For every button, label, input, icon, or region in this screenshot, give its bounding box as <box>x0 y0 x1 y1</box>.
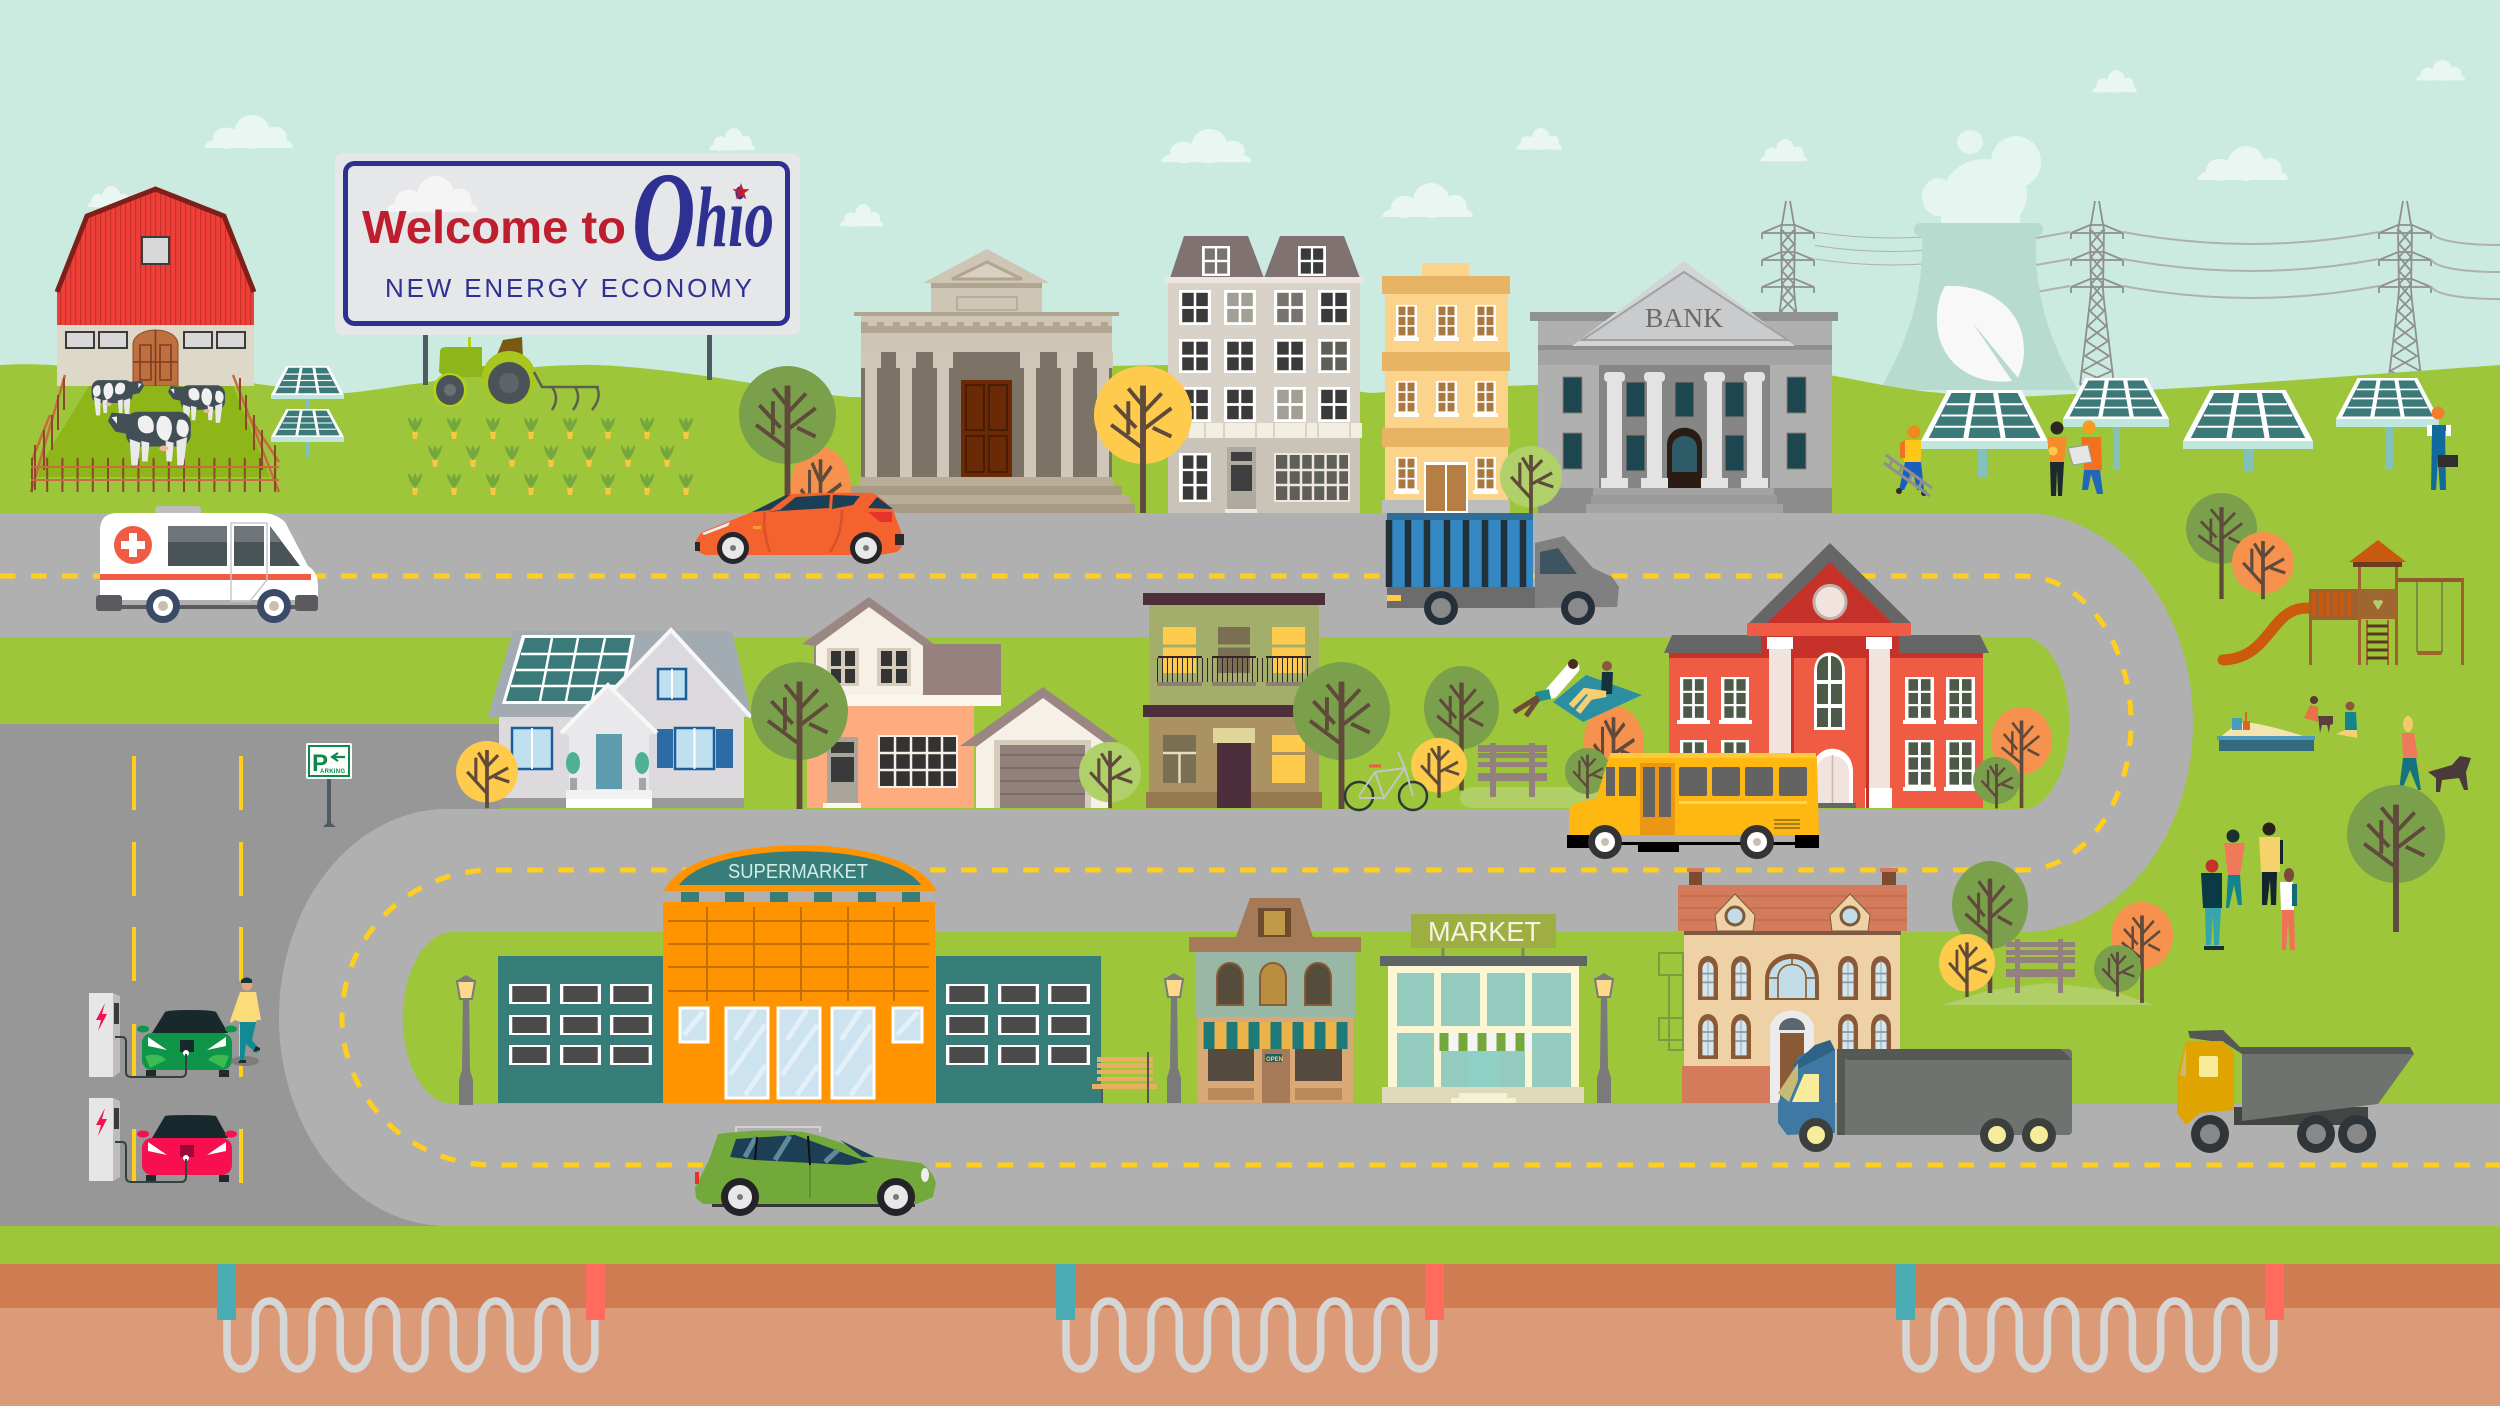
columned temple building <box>840 249 1135 513</box>
green hatchback <box>695 1127 936 1216</box>
person beside charging car <box>230 978 261 1066</box>
town hall <box>1659 868 1907 1103</box>
sign subtitle: NEW ENERGY ECONOMY <box>385 273 752 303</box>
solar array <box>1921 378 2439 477</box>
Ohio script wordmark: O <box>632 146 695 288</box>
power plant steam <box>1922 130 2041 231</box>
welcome sign <box>335 146 800 385</box>
ambulance <box>96 506 318 623</box>
right park tree <box>2347 785 2445 932</box>
tractor <box>433 337 599 410</box>
mid-row trees back <box>1424 666 1644 808</box>
open sign: OPEN <box>1266 1057 1283 1063</box>
cooling tower with leaf <box>1880 223 2078 390</box>
worker with toolbox <box>2427 406 2458 490</box>
playground <box>2223 540 2464 665</box>
Ohio script wordmark: hio <box>695 169 774 265</box>
mid-row trees front <box>456 662 1467 809</box>
market store <box>1380 914 1587 1103</box>
park bench by school <box>1478 743 1547 797</box>
bank building <box>1530 261 1838 513</box>
road and parking lot <box>0 513 2500 1226</box>
parking sign: ARKING <box>320 769 345 775</box>
parking sign <box>306 743 352 827</box>
workers <box>1884 406 2458 496</box>
Ohio star <box>732 183 750 199</box>
yellow dump truck <box>2177 1030 2414 1153</box>
peach house <box>802 597 1119 808</box>
geothermal loops <box>217 1264 2284 1369</box>
picnic blanket and people <box>1514 659 1642 722</box>
sandbox and children <box>2217 696 2357 751</box>
crop rows <box>408 417 693 495</box>
red brick school <box>1664 543 1989 808</box>
supermarket <box>498 845 1101 1103</box>
top-row trees <box>739 366 2294 599</box>
tall grey townhouse <box>1165 236 1363 513</box>
worker with ladder <box>1884 426 1932 496</box>
house with rooftop solar <box>488 630 752 808</box>
bicycle <box>1345 752 1427 810</box>
cow pen with fence <box>31 375 281 492</box>
blue delivery truck <box>1387 513 1619 625</box>
woman white top <box>2280 868 2297 950</box>
woman walking dog <box>2399 716 2471 792</box>
man dark jacket <box>2201 860 2224 950</box>
EV charging station red <box>89 1098 237 1182</box>
worker with plan <box>2068 420 2103 494</box>
green hills and ground <box>0 364 2500 1270</box>
yellow school bus <box>1567 753 1819 859</box>
orange car <box>695 493 904 564</box>
power line pylons and wires <box>1762 201 2500 385</box>
barn <box>57 189 254 386</box>
yellow townhouse <box>1382 263 1510 513</box>
green apartment building <box>1143 593 1325 808</box>
cows <box>92 380 225 465</box>
woman coral shirt <box>2224 830 2245 908</box>
wooden bench <box>2006 939 2075 993</box>
sign headline: Welcome to <box>362 201 626 253</box>
man yellow vest <box>2259 822 2283 905</box>
market sign text: MARKET <box>1428 916 1541 947</box>
EV charging station green <box>89 993 237 1077</box>
bank label: BANK <box>1645 303 1723 333</box>
clouds <box>87 60 2465 227</box>
park trees and bench <box>1939 861 2173 1005</box>
soil layers <box>0 1264 2500 1406</box>
street lamps <box>456 973 1614 1105</box>
orange bench <box>1092 1052 1157 1103</box>
parking sign text: P <box>312 750 328 777</box>
worker in vest <box>2047 422 2067 496</box>
school trees <box>1973 707 2052 808</box>
corner shop <box>1189 898 1361 1103</box>
group of people in park <box>2201 822 2297 950</box>
small solar panels by barn <box>271 366 344 457</box>
supermarket label: SUPERMARKET <box>728 861 868 883</box>
blue semi truck <box>1778 1040 2072 1152</box>
